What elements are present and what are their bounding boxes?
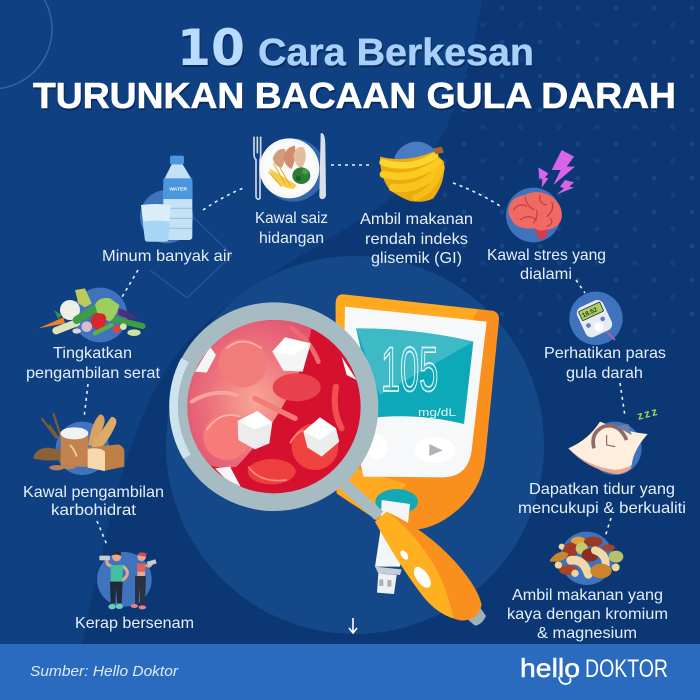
label: karbohidrat	[51, 502, 137, 519]
panel: kawal saiz hidangan	[254, 133, 328, 247]
label	[26, 345, 161, 382]
panel: kawal stres	[487, 150, 606, 283]
arrow	[349, 618, 357, 633]
dotted connectors	[84, 165, 625, 545]
label: Ambil makanan yang	[512, 587, 663, 604]
icon: vegetables	[38, 288, 143, 342]
label: Kawal stres yang	[487, 247, 606, 264]
illustration: glucose meter and magnifier	[170, 294, 499, 626]
label	[544, 345, 666, 382]
label: rendah indeks	[365, 231, 468, 248]
icon: water bottle and glass: WATER	[169, 186, 187, 192]
lancet handle	[340, 480, 486, 626]
label: Tingkatkan	[53, 345, 132, 362]
panel: minum banyak air	[102, 156, 233, 265]
logo: DOKTOR	[585, 655, 668, 683]
icon: clock on pillow: zzz	[636, 406, 660, 423]
label	[23, 484, 164, 519]
label: Dapatkan tidur yang	[529, 481, 675, 498]
icon: brain with lightning	[506, 150, 575, 242]
test strip	[375, 500, 410, 594]
label: Ambil makanan	[360, 211, 473, 228]
icon: bread and flour	[33, 413, 124, 475]
panel: kromium dan magnesium	[507, 532, 668, 642]
panel: dapatkan tidur	[518, 406, 686, 517]
glucose meter: 105	[381, 335, 438, 405]
label	[507, 587, 668, 642]
label	[255, 210, 328, 247]
panel: makanan rendah indeks glisemik	[360, 142, 473, 267]
label: Minum banyak air	[102, 248, 233, 265]
source: Sumber: Hello Doktor	[30, 663, 179, 680]
icon: bananas	[380, 142, 444, 202]
label	[487, 247, 606, 283]
icon: clock on pillow	[568, 406, 660, 475]
label	[360, 211, 473, 267]
logo	[520, 653, 668, 684]
label: Perhatikan paras	[544, 345, 666, 362]
footer	[0, 644, 700, 700]
label: pengambilan serat	[26, 365, 161, 382]
label: Kerap bersenam	[75, 615, 194, 632]
panel: kerap bersenam	[75, 551, 194, 632]
panel: kawal pengambilan karbohidrat	[23, 413, 164, 519]
label	[518, 481, 686, 517]
label: mencukupi & berkualiti	[518, 500, 686, 517]
glucose meter	[336, 294, 499, 529]
title: TURUNKAN BACAAN GULA DARAH	[33, 75, 676, 116]
icon: plate with food	[254, 133, 326, 202]
label: dialami	[520, 266, 572, 283]
label: gula darah	[566, 365, 643, 382]
icon: glucose monitor: 18.52	[581, 306, 599, 319]
icon: mixed nuts	[550, 532, 623, 585]
icon: exercising couple	[97, 551, 156, 609]
glucose meter: mg/dL	[418, 407, 456, 419]
title	[33, 19, 676, 116]
panel: tingkatkan pengambilan serat	[26, 288, 161, 382]
label: kaya dengan kromium	[507, 606, 668, 623]
magnifying glass	[170, 302, 378, 511]
title: Cara Berkesan	[258, 32, 534, 74]
label: glisemik (GI)	[371, 250, 462, 267]
label: hidangan	[259, 230, 324, 247]
sugar cubes	[195, 337, 357, 487]
title: 10	[177, 19, 245, 77]
label: Kawal pengambilan	[23, 484, 164, 501]
label: Kawal saiz	[255, 210, 328, 227]
logo: hello	[520, 653, 580, 683]
label: & magnesium	[537, 625, 637, 642]
panel: perhatikan paras gula darah	[544, 292, 666, 382]
